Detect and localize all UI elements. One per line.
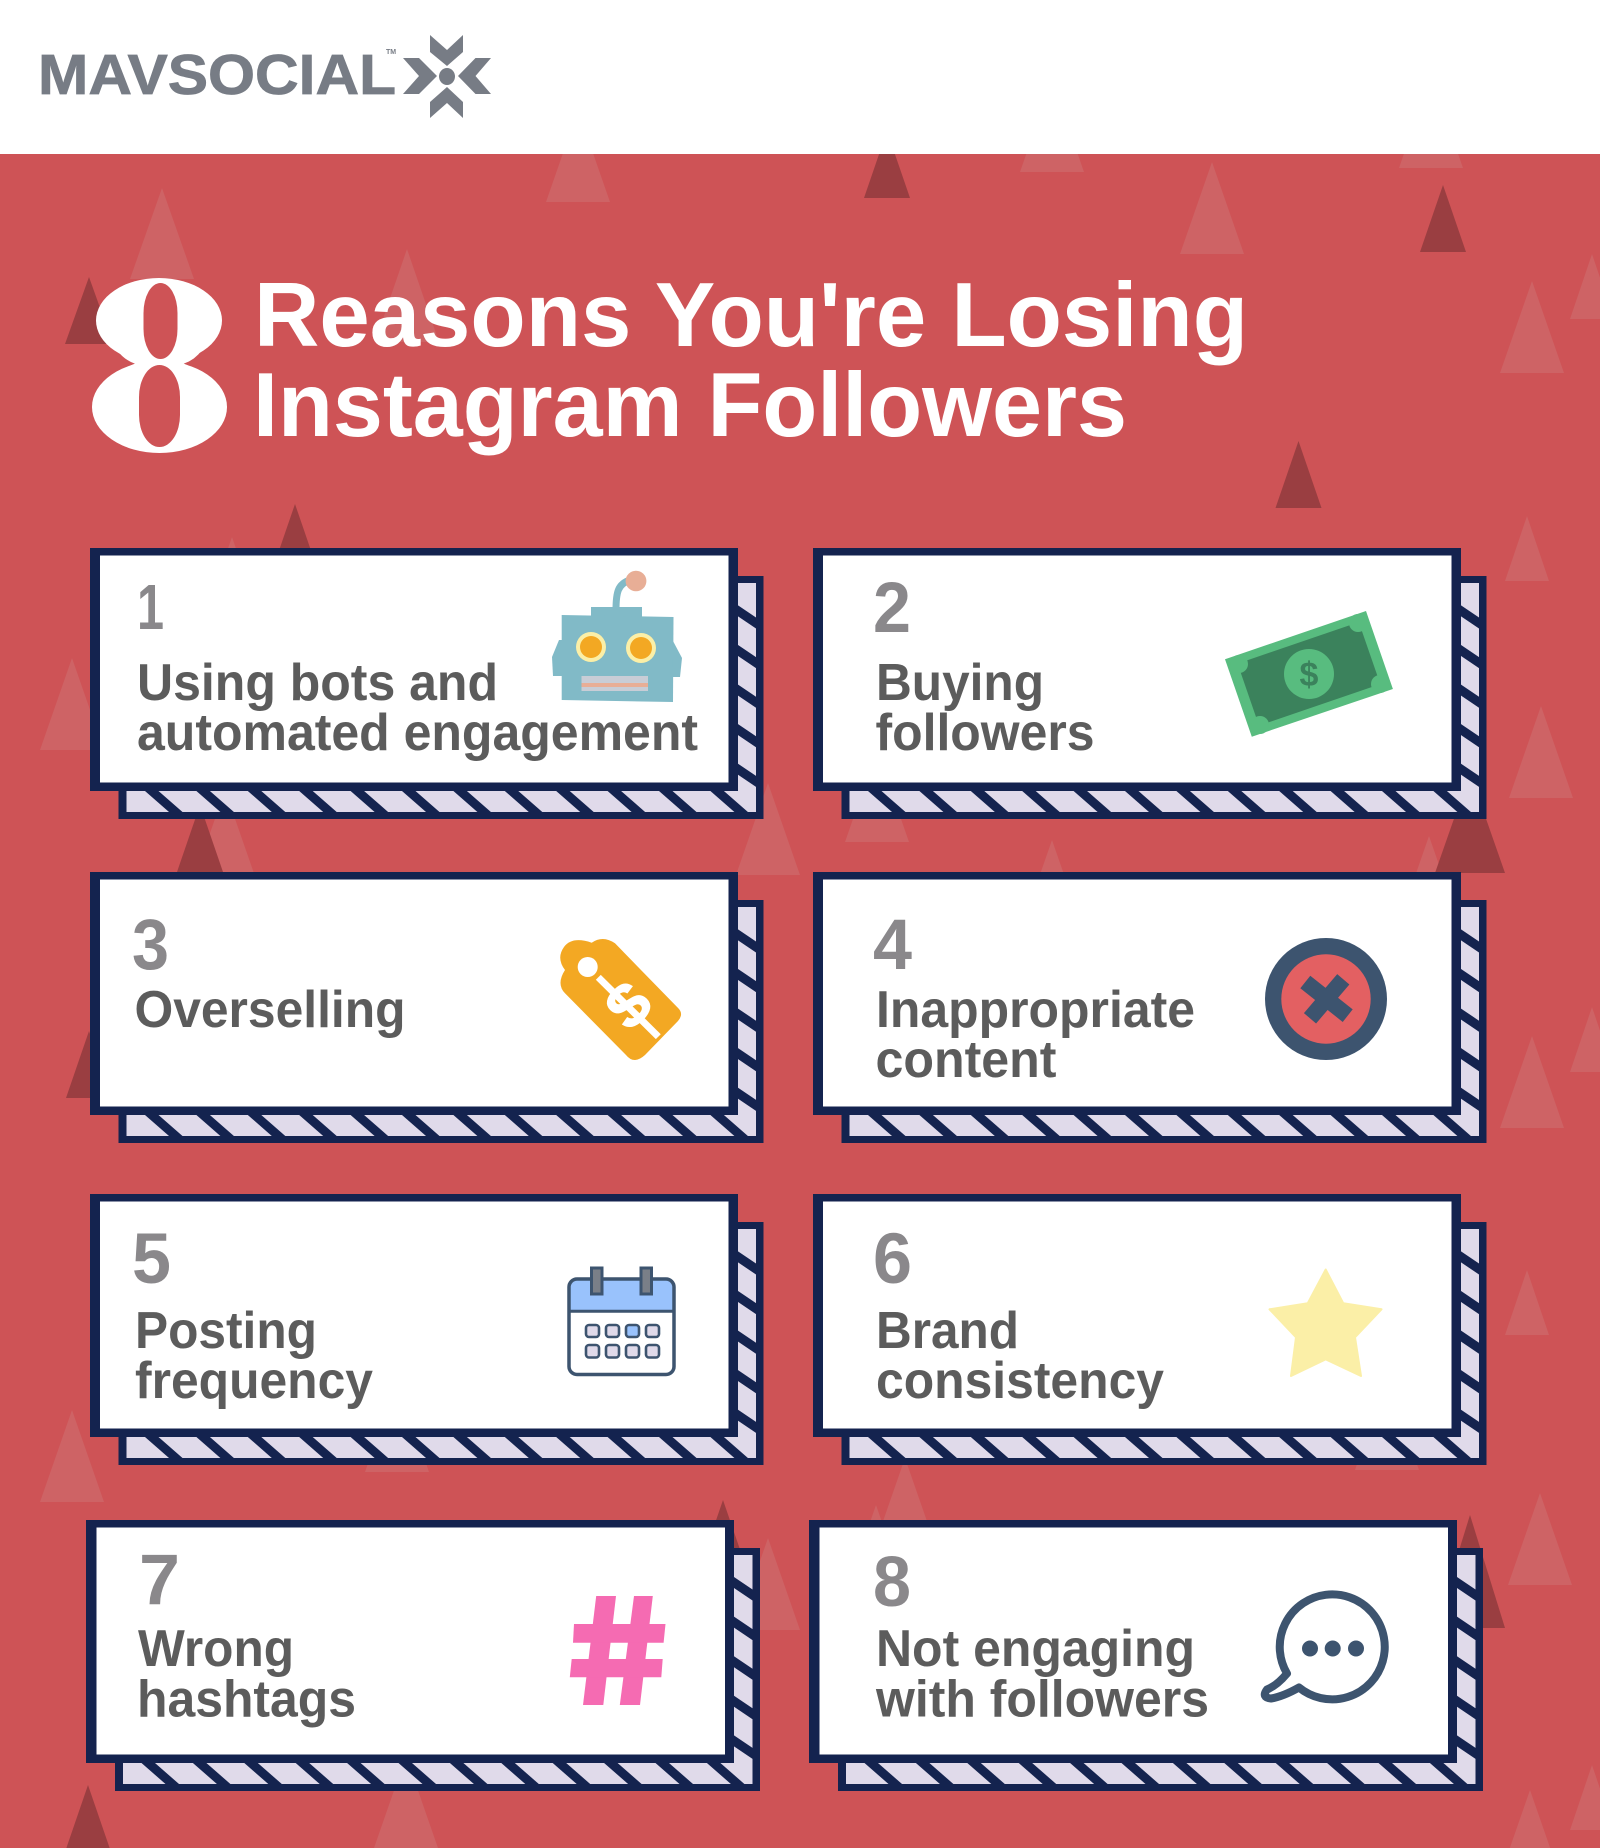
icon: dollar bill: $ <box>1300 656 1319 694</box>
card 8 striped backing <box>838 1548 1483 1791</box>
card 7 text <box>137 1620 356 1728</box>
card 4 striped backing <box>842 900 1486 1143</box>
card 4 number: 4 <box>873 906 912 985</box>
card 7 text: Wrong <box>138 1620 294 1678</box>
icon: price tag: S <box>592 969 665 1042</box>
trademark: TM <box>386 49 396 56</box>
icon: price tag <box>560 939 681 1060</box>
icon: robot <box>552 571 682 702</box>
logo <box>38 35 491 118</box>
card 7 frame <box>86 1520 734 1763</box>
card 1 <box>90 548 764 819</box>
card 6 number: 6 <box>873 1220 912 1299</box>
card 5 number: 5 <box>132 1220 171 1299</box>
card 4 frame <box>813 872 1461 1115</box>
card 4 text: Inappropriate <box>876 981 1195 1039</box>
header band <box>0 0 1600 154</box>
card 7 panel <box>96 1528 725 1754</box>
logo wordmark: MAVSOCIAL <box>38 43 396 107</box>
card 3 <box>90 872 764 1143</box>
card 5 text: Posting <box>135 1302 317 1360</box>
card 6 frame <box>813 1194 1461 1437</box>
card 3 panel <box>100 880 728 1106</box>
card 2 striped backing <box>842 576 1486 819</box>
card 2 text: followers <box>876 704 1094 762</box>
card 1 panel <box>100 556 728 782</box>
big numeral 8: 8 <box>100 233 220 499</box>
card 8 text: Not engaging <box>876 1620 1195 1678</box>
card 7 text: hashtags <box>137 1670 356 1728</box>
card 6 text <box>876 1302 1164 1410</box>
icon: error circle <box>1265 938 1387 1060</box>
card 5 frame <box>90 1194 738 1437</box>
card 1 striped backing <box>118 576 764 819</box>
card 2 panel <box>823 556 1452 782</box>
card 8 frame <box>809 1520 1457 1763</box>
icon: hashtag <box>570 1596 666 1705</box>
card 2 frame <box>813 548 1461 791</box>
card 2 text: Buying <box>876 654 1044 712</box>
card 1 text <box>137 654 698 762</box>
card 6 panel <box>823 1202 1452 1428</box>
card 8 text: with followers <box>875 1670 1209 1728</box>
icon: star <box>1270 1270 1382 1376</box>
card 4 panel <box>823 880 1452 1106</box>
card 8 panel <box>820 1528 1448 1754</box>
card 4 <box>813 872 1486 1143</box>
card 1 number: 1 <box>137 571 164 643</box>
card 8 <box>809 1520 1483 1791</box>
icon: calendar <box>569 1268 674 1374</box>
card 7 <box>86 1520 760 1791</box>
card 8 text <box>875 1620 1209 1728</box>
card 1 frame <box>90 548 738 791</box>
card 3 number: 3 <box>132 906 169 985</box>
card 2 text <box>876 654 1094 762</box>
card 3 text: Overselling <box>134 981 406 1039</box>
card 4 text <box>876 981 1195 1089</box>
card 5 panel <box>100 1202 728 1428</box>
card 6 text: consistency <box>876 1352 1164 1410</box>
title: Reasons You're Losing <box>254 265 1248 366</box>
card 1 text: automated engagement <box>137 704 698 762</box>
card 6 text: Brand <box>876 1302 1019 1360</box>
card 2 <box>813 548 1486 819</box>
card 4 text: content <box>876 1031 1056 1089</box>
card 3 frame <box>90 872 738 1115</box>
icon: speech bubble <box>1265 1594 1385 1699</box>
title: Instagram Followers <box>253 355 1127 456</box>
card 3 striped backing <box>118 900 764 1143</box>
logo mark <box>403 35 491 118</box>
card 5 striped backing <box>118 1222 764 1465</box>
card 7 number: 7 <box>139 1541 180 1620</box>
card 5 text: frequency <box>135 1352 373 1410</box>
card 2 number: 2 <box>873 569 911 648</box>
card 7 striped backing <box>115 1548 760 1791</box>
icon: dollar bill <box>1225 611 1393 737</box>
card 5 text <box>135 1302 373 1410</box>
card 6 striped backing <box>842 1222 1486 1465</box>
title <box>253 265 1248 456</box>
card 1 text: Using bots and <box>137 654 498 712</box>
card 6 <box>813 1194 1486 1465</box>
card 8 number: 8 <box>873 1543 911 1622</box>
card 5 <box>90 1194 764 1465</box>
